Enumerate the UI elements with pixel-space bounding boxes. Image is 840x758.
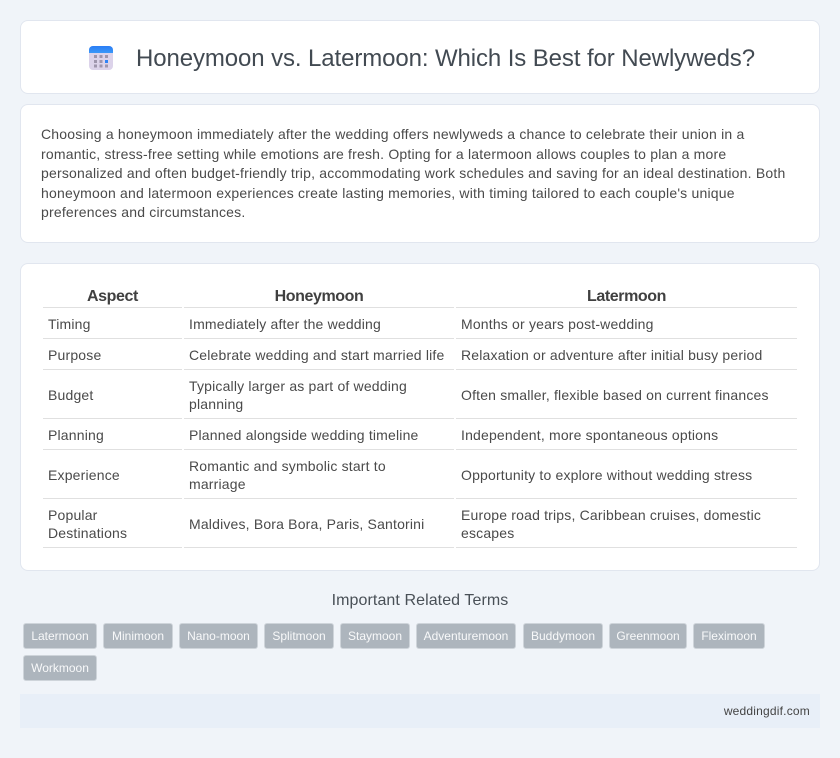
comparison table: Maldives, Bora Bora, Paris, Santorini	[189, 516, 424, 532]
comparison table: Often smaller, flexible based on current finances	[461, 387, 769, 403]
comparison table: Latermoon	[587, 288, 666, 305]
comparison table: Independent, more spontaneous options	[461, 427, 718, 443]
comparison table: Planning	[48, 427, 104, 443]
related term tags: Greenmoon	[616, 629, 680, 643]
comparison table: Europe road trips, Caribbean cruises, domestic	[461, 507, 761, 523]
title: Honeymoon vs. Latermoon: Which Is Best for Newlyweds?	[136, 45, 755, 72]
intro text: preferences and circumstances.	[41, 204, 245, 220]
comparison table: Relaxation or adventure after initial busy period	[461, 347, 762, 363]
comparison table: Destinations	[48, 525, 127, 541]
comparison table: Planned alongside wedding timeline	[189, 427, 418, 443]
footer source text: weddingdif.com	[724, 704, 810, 718]
comparison table: planning	[189, 396, 243, 412]
comparison table: Purpose	[48, 347, 101, 363]
comparison table: Budget	[48, 387, 93, 403]
comparison table: Popular	[48, 507, 98, 523]
related term tags: Adventuremoon	[424, 629, 508, 643]
comparison table panel	[20, 263, 820, 571]
comparison table: marriage	[189, 476, 246, 492]
comparison table: Opportunity to explore without wedding stress	[461, 467, 752, 483]
related term tags: Buddymoon	[531, 629, 595, 643]
intro text: personalized and often budget-friendly trip, accommodating work schedules and saving for an ideal destination. Both	[41, 165, 785, 181]
related term tags: Workmoon	[31, 661, 89, 675]
icon: calendar	[89, 46, 113, 70]
intro text: romantic, stress-free setting while emotions are fresh. Opting for a latermoon allows couples to plan a more	[41, 146, 726, 162]
comparison table: Months or years post-wedding	[461, 316, 654, 332]
intro text: Choosing a honeymoon immediately after the wedding offers newlyweds a chance to celebrate their union in a	[41, 126, 744, 142]
related term tags: Latermoon	[31, 629, 89, 643]
related term tags: Splitmoon	[272, 629, 326, 643]
comparison table: Honeymoon	[275, 288, 363, 305]
related term tags: Staymoon	[348, 629, 402, 643]
comparison table: Timing	[48, 316, 91, 332]
footer bar	[20, 694, 820, 728]
related term tags: Minimoon	[112, 629, 164, 643]
related terms heading: Important Related Terms	[332, 592, 508, 609]
intro text: honeymoon and latermoon experiences create lasting memories, with timing tailored to each couple's unique	[41, 185, 735, 201]
comparison table: Aspect	[87, 288, 138, 305]
header panel	[20, 20, 820, 94]
comparison table: escapes	[461, 525, 514, 541]
comparison table: Romantic and symbolic start to	[189, 458, 386, 474]
intro panel	[20, 104, 820, 243]
intro text	[41, 126, 785, 220]
comparison table: Immediately after the wedding	[189, 316, 381, 332]
related term tags: Nano-moon	[187, 629, 250, 643]
comparison table: Celebrate wedding and start married life	[189, 347, 444, 363]
comparison table: Experience	[48, 467, 120, 483]
comparison table	[43, 288, 797, 548]
comparison table: Typically larger as part of wedding	[189, 378, 407, 394]
related term tags: Fleximoon	[701, 629, 757, 643]
